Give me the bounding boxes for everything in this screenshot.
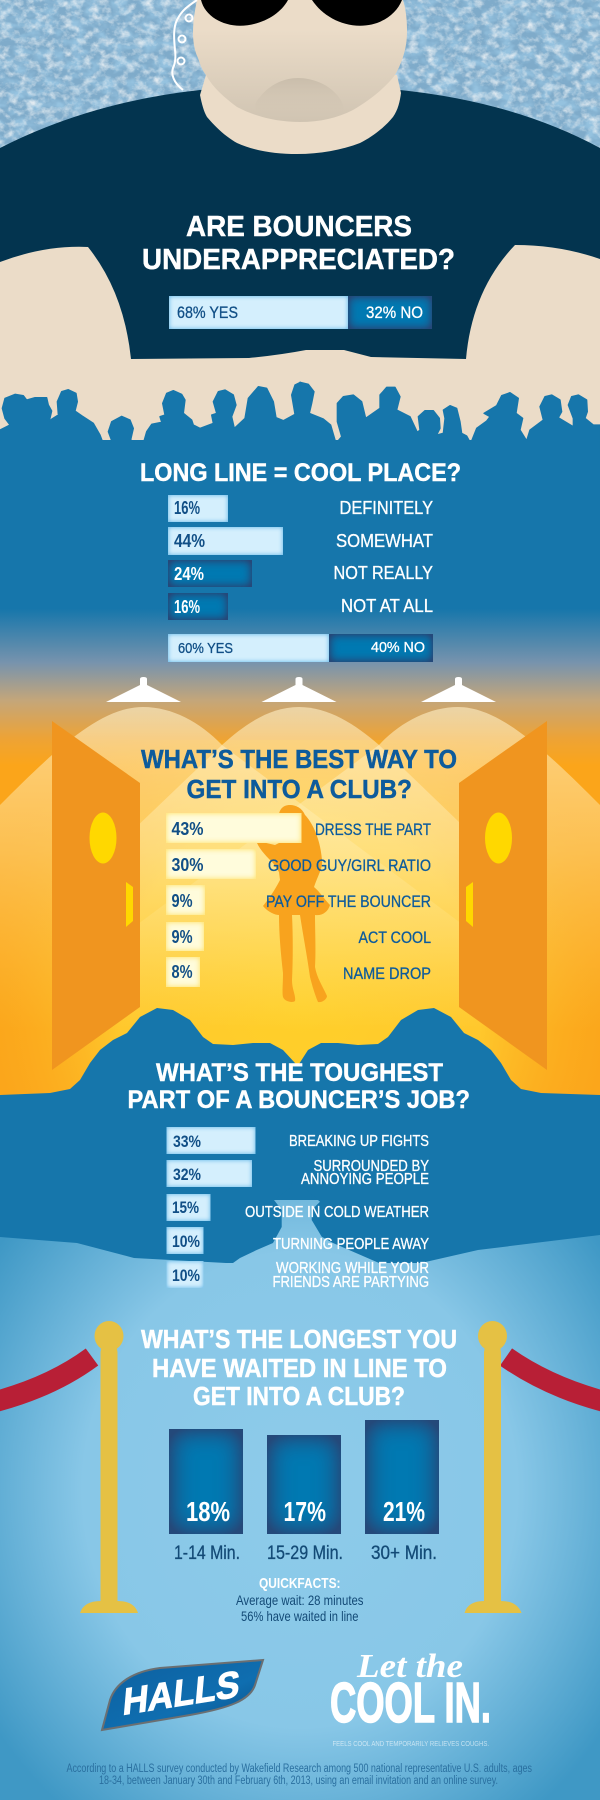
heading (141, 1324, 457, 1411)
question 3: best way into a club (141, 744, 457, 987)
logo: halls: HALLS (121, 1662, 242, 1723)
heading: UNDERAPPRECIATED? (142, 244, 455, 276)
bar chart: ANNOYING PEOPLE (301, 1171, 429, 1188)
silhouette: bouncer from behind (0, 1008, 600, 1263)
quickfacts: Average wait: 28 minutes (236, 1592, 364, 1608)
heading: WHAT’S THE TOUGHEST (156, 1059, 443, 1087)
panel: bouncer figure (0, 0, 600, 450)
bar chart: 15% (172, 1198, 199, 1217)
bar chart: 16% (174, 498, 200, 518)
velvet ropes (0, 1357, 600, 1403)
bar chart (166, 1127, 429, 1291)
bar chart: GOOD GUY/GIRL RATIO (268, 856, 431, 875)
bar chart: 10% (172, 1266, 200, 1285)
bar chart: NOT AT ALL (341, 596, 433, 616)
yes/no bar: 32% NO (366, 303, 423, 322)
heading: GET INTO A CLUB? (193, 1381, 405, 1411)
bar chart: DEFINITELY (340, 498, 433, 518)
logo: halls (102, 1660, 263, 1730)
bar chart: DRESS THE PART (315, 820, 431, 839)
column chart: 15-29 Min. (267, 1543, 343, 1564)
bar chart: BREAKING UP FIGHTS (289, 1133, 429, 1150)
bar chart: 9% (172, 891, 192, 911)
bar chart (168, 495, 433, 620)
question 4: toughest part of the job (128, 1059, 470, 1291)
column chart: 1-14 Min. (174, 1543, 240, 1564)
heading: PART OF A BOUNCER’S JOB? (128, 1086, 470, 1114)
bar chart: WORKING WHILE YOUR (276, 1260, 429, 1277)
yes/no bar: 68% YES (177, 303, 238, 322)
bar chart: FRIENDS ARE PARTYING (272, 1274, 429, 1291)
quickfacts: QUICKFACTS: (259, 1575, 340, 1592)
bar chart: OUTSIDE IN COLD WEATHER (245, 1204, 429, 1221)
question 5: longest wait (141, 1324, 457, 1624)
bar chart: 43% (172, 819, 204, 839)
stanchion posts (80, 1321, 522, 1613)
background: yellow club glow (0, 740, 600, 1140)
column chart: 18% (186, 1496, 230, 1527)
arms and torso (0, 245, 600, 450)
question 2: long line = cool place (140, 459, 461, 662)
yes/no bar: 40% NO (371, 639, 425, 656)
light beams (0, 707, 600, 1060)
background: textured wall (0, 0, 600, 170)
bar chart: 32% (173, 1165, 201, 1184)
crowd silhouettes (0, 382, 600, 565)
right post (464, 1321, 522, 1613)
column chart: 21% (383, 1496, 425, 1527)
bar chart: 24% (174, 564, 204, 584)
heading: ARE BOUNCERS (186, 211, 412, 243)
tagline: let the cool in (330, 1648, 491, 1748)
yes/no bar: 60% YES (178, 640, 233, 657)
bar chart: SOMEWHAT (336, 531, 433, 551)
heading (141, 744, 457, 804)
column chart: 17% (284, 1496, 326, 1527)
earpiece wire (172, 0, 197, 90)
column chart: 30+ Min. (371, 1543, 437, 1564)
sunglasses (201, 0, 402, 26)
heading: GET INTO A CLUB? (186, 774, 412, 804)
yes/no bar (168, 634, 433, 662)
bar chart: SURROUNDED BY (314, 1158, 429, 1175)
tagline: let the cool in: COOL IN. (330, 1671, 491, 1735)
bar chart: NAME DROP (343, 964, 431, 983)
silhouette: woman at club (257, 805, 330, 1002)
right door (459, 721, 547, 1070)
bar chart: 9% (172, 927, 192, 947)
bar chart: 10% (172, 1232, 200, 1251)
bar chart: 33% (173, 1132, 201, 1151)
background: blue to orange dusk (0, 560, 600, 1100)
background: ice blue lower section (0, 1200, 600, 1800)
left door (52, 721, 140, 1070)
ceiling lamps (106, 677, 496, 702)
question 1: are bouncers underappreciated (142, 211, 455, 329)
heading (128, 1059, 470, 1114)
bar chart (166, 813, 431, 987)
footnote (66, 1763, 532, 1787)
bar chart: ACT COOL (358, 928, 431, 947)
heading: LONG LINE = COOL PLACE? (140, 459, 461, 487)
bar chart: 44% (174, 531, 205, 551)
chin shadow (255, 78, 343, 119)
bar chart: TURNING PEOPLE AWAY (273, 1236, 429, 1253)
bar chart: NOT REALLY (334, 563, 433, 583)
tagline: let the cool in: Let the (356, 1648, 463, 1685)
bar chart: PAY OFF THE BOUNCER (266, 892, 431, 911)
left post (80, 1321, 138, 1613)
bar chart: 8% (172, 962, 192, 982)
heading: WHAT’S THE LONGEST YOU (141, 1324, 457, 1354)
column chart (169, 1420, 439, 1564)
heading: HAVE WAITED IN LINE TO (152, 1353, 447, 1383)
bar chart: 16% (174, 597, 200, 617)
quickfacts (236, 1575, 364, 1624)
neck (200, 75, 401, 154)
quickfacts: 56% have waited in line (241, 1608, 359, 1624)
heading (142, 211, 455, 276)
tagline: let the cool in: FEELS COOL AND TEMPORARILY RELIEVES COUGHS. (332, 1741, 489, 1748)
shirt (0, 90, 600, 372)
yes/no bar (169, 296, 432, 329)
bar chart: 30% (172, 855, 204, 875)
heading: WHAT’S THE BEST WAY TO (141, 744, 457, 774)
head (193, 0, 407, 122)
footnote: 18-34, between January 30th and February 6th, 2013, using an email invitation and an online survey. (99, 1775, 498, 1787)
open doors (52, 721, 547, 1070)
